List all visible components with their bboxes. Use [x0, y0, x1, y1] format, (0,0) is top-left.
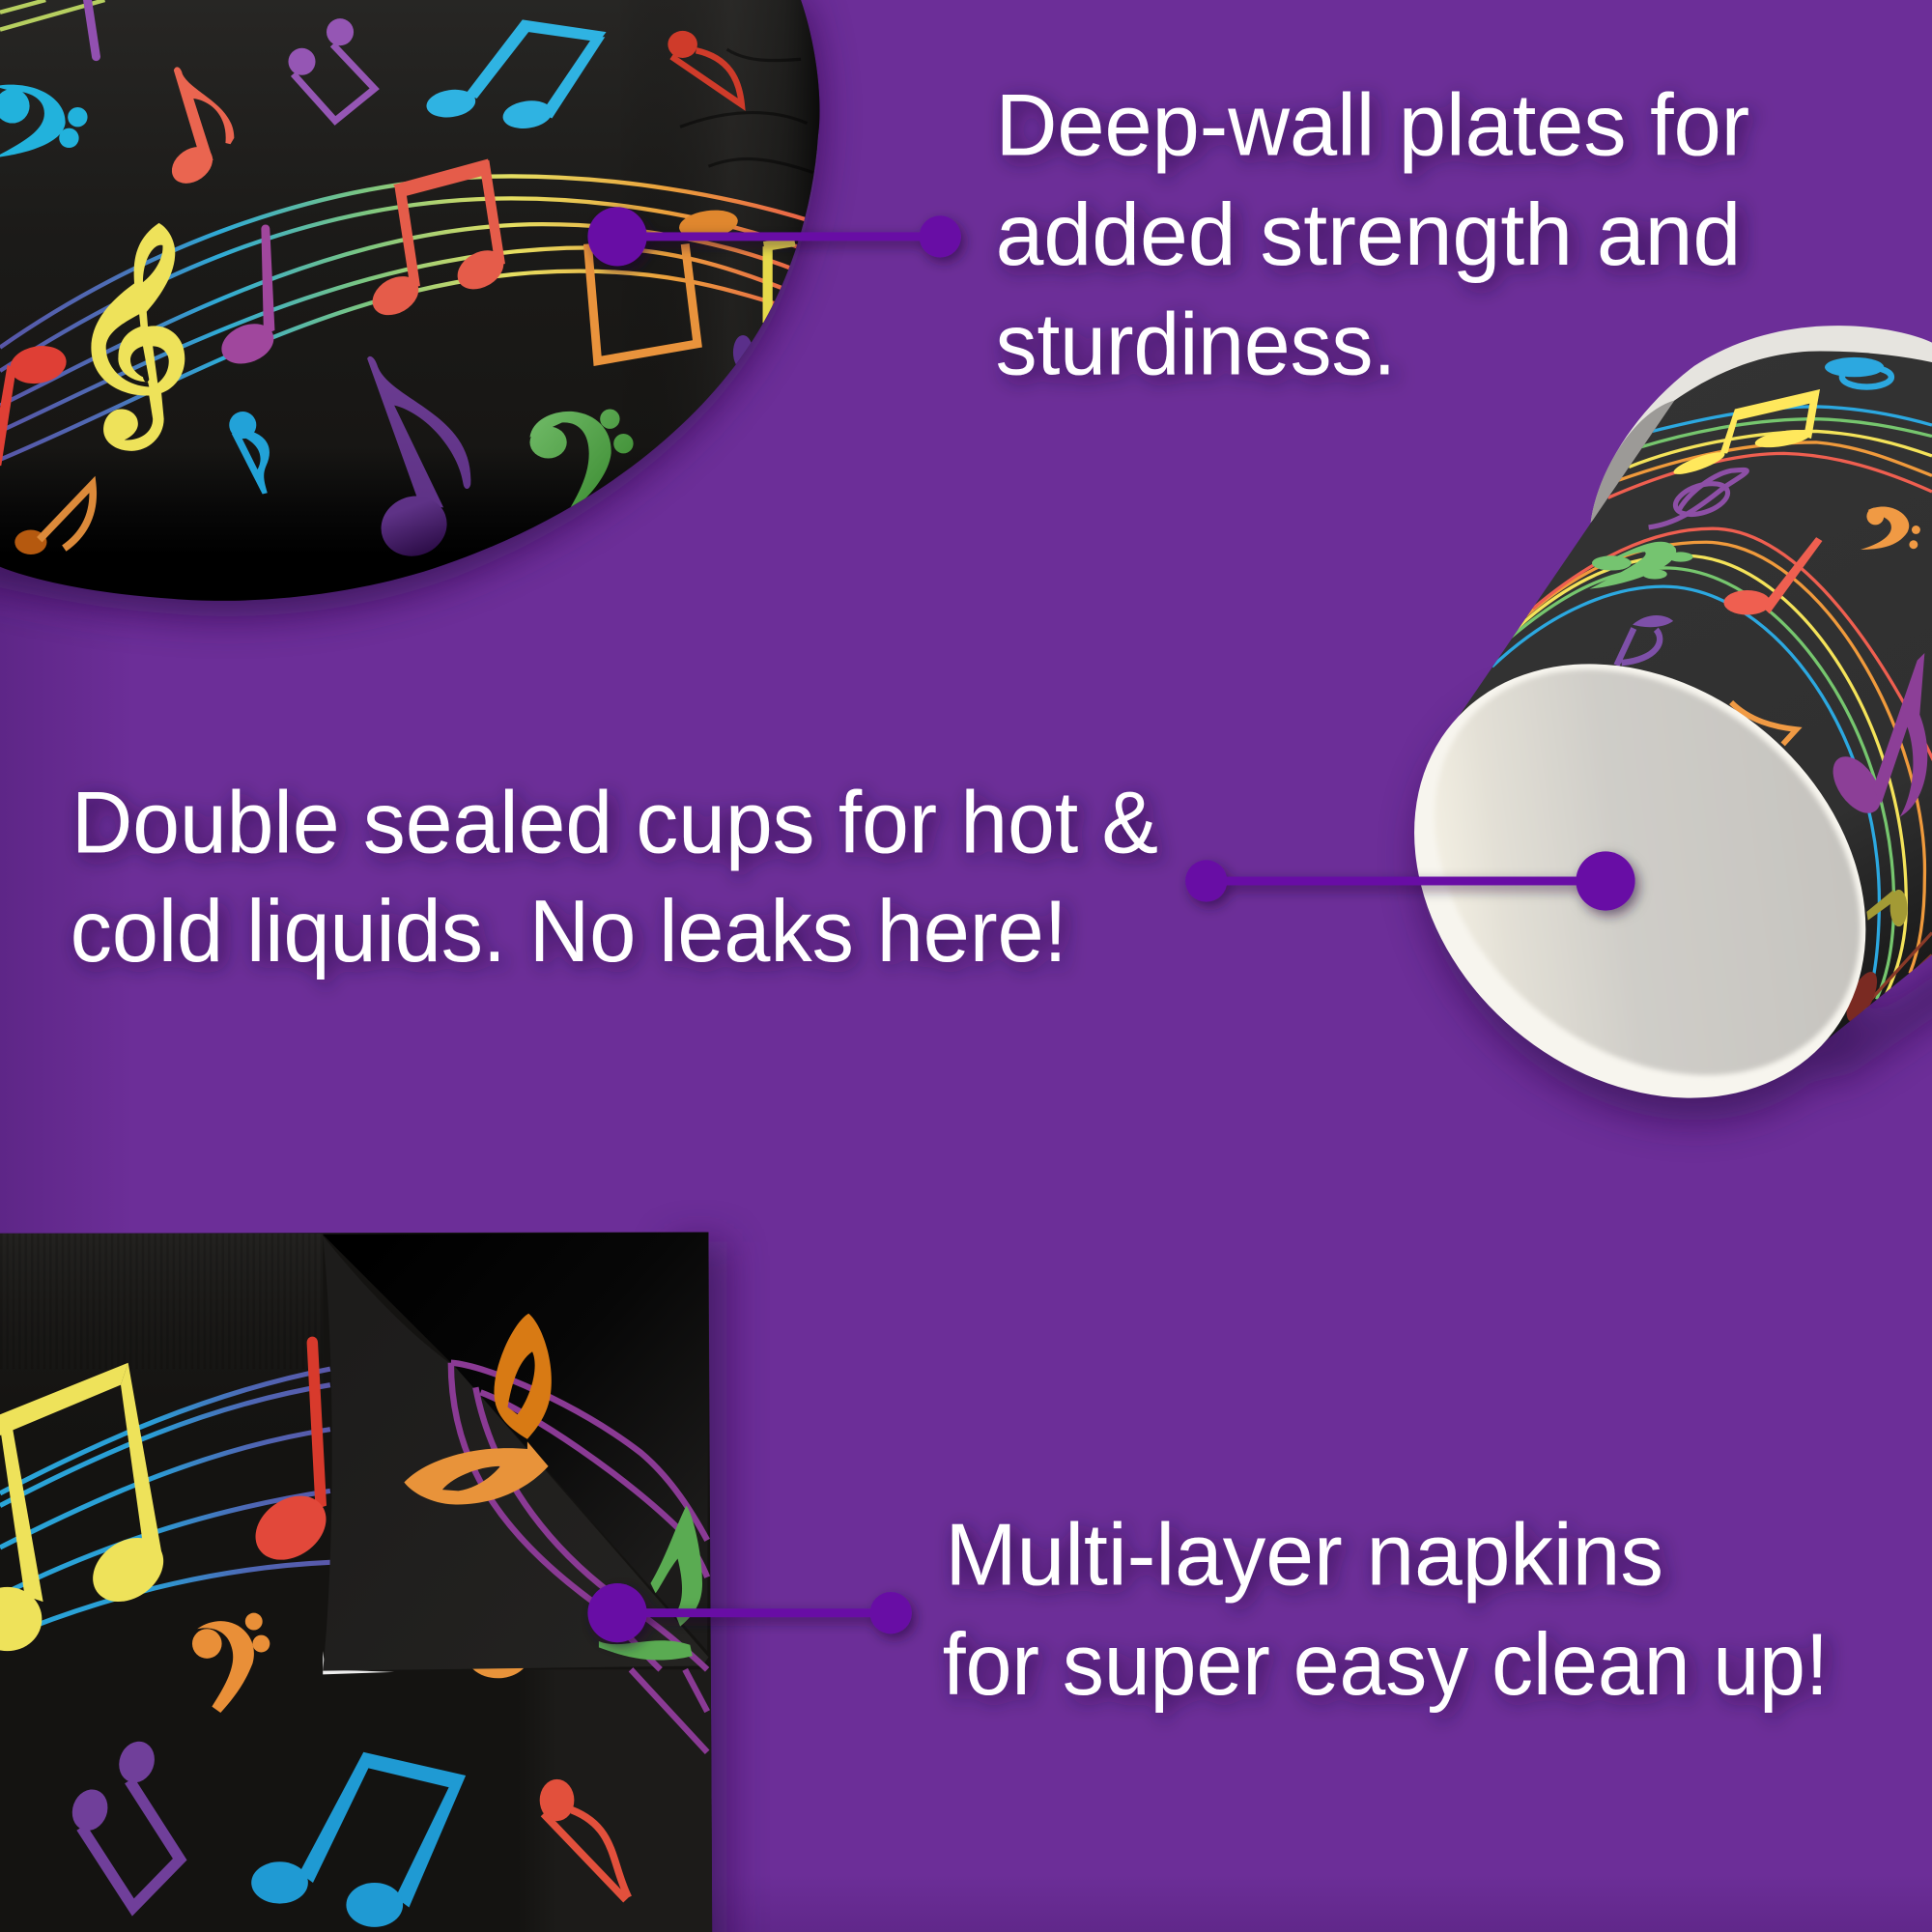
note: purple quarter: [221, 224, 274, 363]
cup upper staff: [1608, 407, 1932, 497]
text block: cups: [71, 775, 1158, 980]
napkin fold back: [323, 1233, 708, 1651]
cup bottom rim: [1327, 574, 1932, 1188]
cup lower staff arcs: [1492, 528, 1932, 1023]
note: top purple stem: [88, 0, 96, 57]
napkin lower purple lines: [631, 1669, 707, 1752]
text block: plates: added strength and: [996, 186, 1741, 284]
note: red left: [0, 342, 70, 466]
callout: napkin connector: [587, 1583, 912, 1642]
napkin note: orange lower leaf: [404, 1441, 549, 1504]
text block: plates: [996, 77, 1749, 394]
cup note: large purple: [1823, 653, 1927, 822]
plate staff lines: [0, 176, 813, 460]
cup note: dark red: [1840, 968, 1884, 1026]
cup rim: [1591, 326, 1932, 523]
napkin note: red: [243, 1337, 338, 1573]
plate artwork: [0, 0, 838, 616]
cup note: red: [1723, 537, 1822, 614]
note: treble clef: [91, 223, 185, 451]
panel: cup: [1327, 326, 1932, 1209]
text block: napkins: [943, 1506, 1829, 1714]
napkin lower right tone: [518, 1669, 715, 1932]
top staff fragments: [0, 0, 104, 30]
napkin note: purple pair: [67, 1736, 180, 1907]
note: blue bass clef: [0, 85, 88, 157]
note: yellow clipped: [764, 242, 795, 323]
note: orange small: [14, 484, 93, 554]
cup rim shading: [1591, 401, 1674, 523]
cup bottom inner: [1353, 586, 1932, 1158]
plate shadow: [0, 0, 820, 616]
note: red pair: [373, 158, 505, 315]
cup note: olive: [1866, 890, 1907, 926]
text block: plates: sturdiness.: [996, 297, 1396, 394]
cup note: orange bass clef: [1861, 507, 1920, 550]
panel: napkin: [0, 1233, 727, 1932]
napkin note: blue pair: [251, 1752, 466, 1927]
callout: plate connector: [587, 207, 961, 267]
cup shadow: [1332, 596, 1932, 1209]
cup note: yellow pair: [1671, 389, 1820, 478]
note: large purple: [367, 356, 470, 565]
napkin purple flap arcs: [451, 1363, 707, 1669]
napkin note: orange upper leaf: [494, 1314, 552, 1439]
text block: napkins: Multi-layer napkins: [945, 1506, 1663, 1604]
note: red corner: [668, 31, 742, 104]
napkin white corner: [323, 1651, 394, 1674]
text block: napkins: for super easy clean up!: [943, 1616, 1829, 1714]
note: blue pair: [425, 19, 607, 131]
napkin ribs: [0, 1234, 323, 1369]
text block: cups: cold liquids. No leaks here!: [71, 883, 1067, 980]
cup note: green bass clef: [1589, 542, 1693, 589]
text block: cups: Double sealed cups for hot &: [71, 775, 1158, 872]
napkin staff left: [0, 1369, 330, 1628]
note: coral eighth: [172, 67, 234, 184]
cup note: purple treble: [1649, 469, 1747, 527]
cup note: orange partial: [1731, 702, 1797, 744]
note: blue small: [229, 412, 270, 494]
note: green bass clef: [529, 409, 634, 514]
note: purple clipped: [732, 335, 752, 365]
napkin note: green: [599, 1506, 702, 1661]
note: purple pair: [288, 18, 375, 121]
napkin note: orange bass clef: [192, 1613, 270, 1713]
panel: plate: [0, 0, 838, 616]
napkin fold front: [323, 1236, 708, 1671]
napkin note: yellow pair: [0, 1363, 176, 1651]
napkin upper tone: [0, 1234, 323, 1455]
text block: plates: Deep-wall plates for: [996, 77, 1749, 175]
cup note: blue clef: [1825, 357, 1891, 387]
note: orange pair: [587, 207, 740, 361]
cup note: purple beam: [1616, 615, 1673, 666]
napkin note: red right: [540, 1779, 629, 1900]
cup body: [1441, 345, 1932, 1084]
napkin artwork: [0, 1233, 715, 1932]
napkin orange sliver: [469, 1663, 527, 1678]
napkin shadow: [671, 1242, 727, 1932]
callout: cup connector: [1185, 851, 1635, 911]
